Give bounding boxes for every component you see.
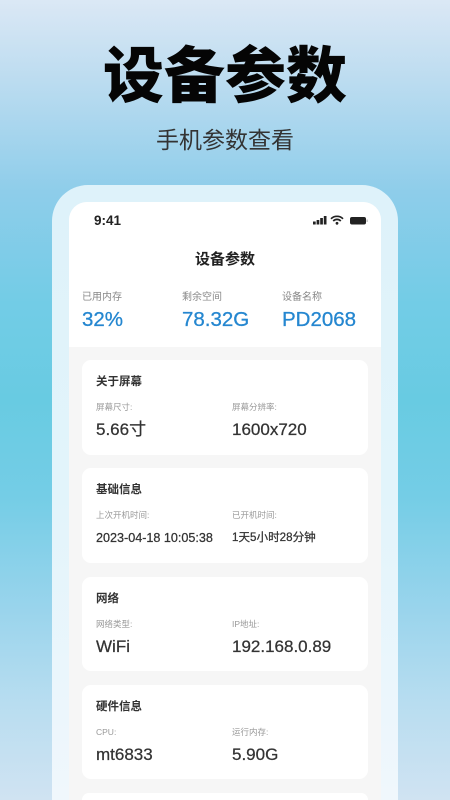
stat: device name: PD2068 <box>282 308 356 331</box>
panel: hardware: 运行内存: <box>232 727 268 737</box>
phone screen <box>69 202 381 800</box>
stat: used memory <box>82 291 123 331</box>
panel: hardware: mt6833 <box>96 745 153 764</box>
panel: hardware: 5.90G <box>232 745 278 764</box>
panel: basic info: 已开机时间: <box>232 510 277 520</box>
screen heading: 设备参数 <box>195 251 255 268</box>
panel: basic info: 2023-04-18 10:05:38 <box>96 531 213 545</box>
stat: free space: 剩余空间 <box>182 292 222 303</box>
panel: screen <box>82 360 368 455</box>
stat: free space <box>182 291 249 331</box>
panel: hardware: CPU: <box>96 727 116 737</box>
panel: screen: 1600x720 <box>232 420 307 439</box>
title: 设备参数 <box>103 42 347 110</box>
stat: used memory: 32% <box>82 308 123 331</box>
panel: next card (cropped) <box>82 793 368 800</box>
panel: network: 网络类型: <box>96 619 132 629</box>
panel: network: WiFi <box>96 637 130 656</box>
stat: used memory: 已用内存 <box>82 292 122 303</box>
stat: device name <box>282 291 356 331</box>
status bar time: 9:41 <box>94 213 121 228</box>
panel: hardware <box>82 685 368 779</box>
panel: screen: 5.66寸 <box>96 420 146 439</box>
panel: network <box>82 577 368 671</box>
panel: network: 网络 <box>96 593 119 605</box>
panel: basic info: 1天5小时28分钟 <box>232 531 316 544</box>
panel: screen: 关于屏幕 <box>96 376 142 388</box>
stat: free space: 78.32G <box>182 308 249 331</box>
panel: basic info <box>82 468 368 563</box>
icon: status indicators <box>313 216 368 225</box>
panel: basic info: 上次开机时间: <box>96 510 149 520</box>
phone frame <box>52 185 398 800</box>
panel: hardware: 硬件信息 <box>96 701 142 713</box>
panel: network: IP地址: <box>232 619 259 629</box>
panel: network: 192.168.0.89 <box>232 637 331 656</box>
panel: screen: 屏幕尺寸: <box>96 402 132 412</box>
subtitle: 手机参数查看 <box>156 127 294 153</box>
stat: device name: 设备名称 <box>282 292 322 303</box>
panel: basic info: 基础信息 <box>96 484 142 496</box>
panel: screen: 屏幕分辨率: <box>232 402 277 412</box>
